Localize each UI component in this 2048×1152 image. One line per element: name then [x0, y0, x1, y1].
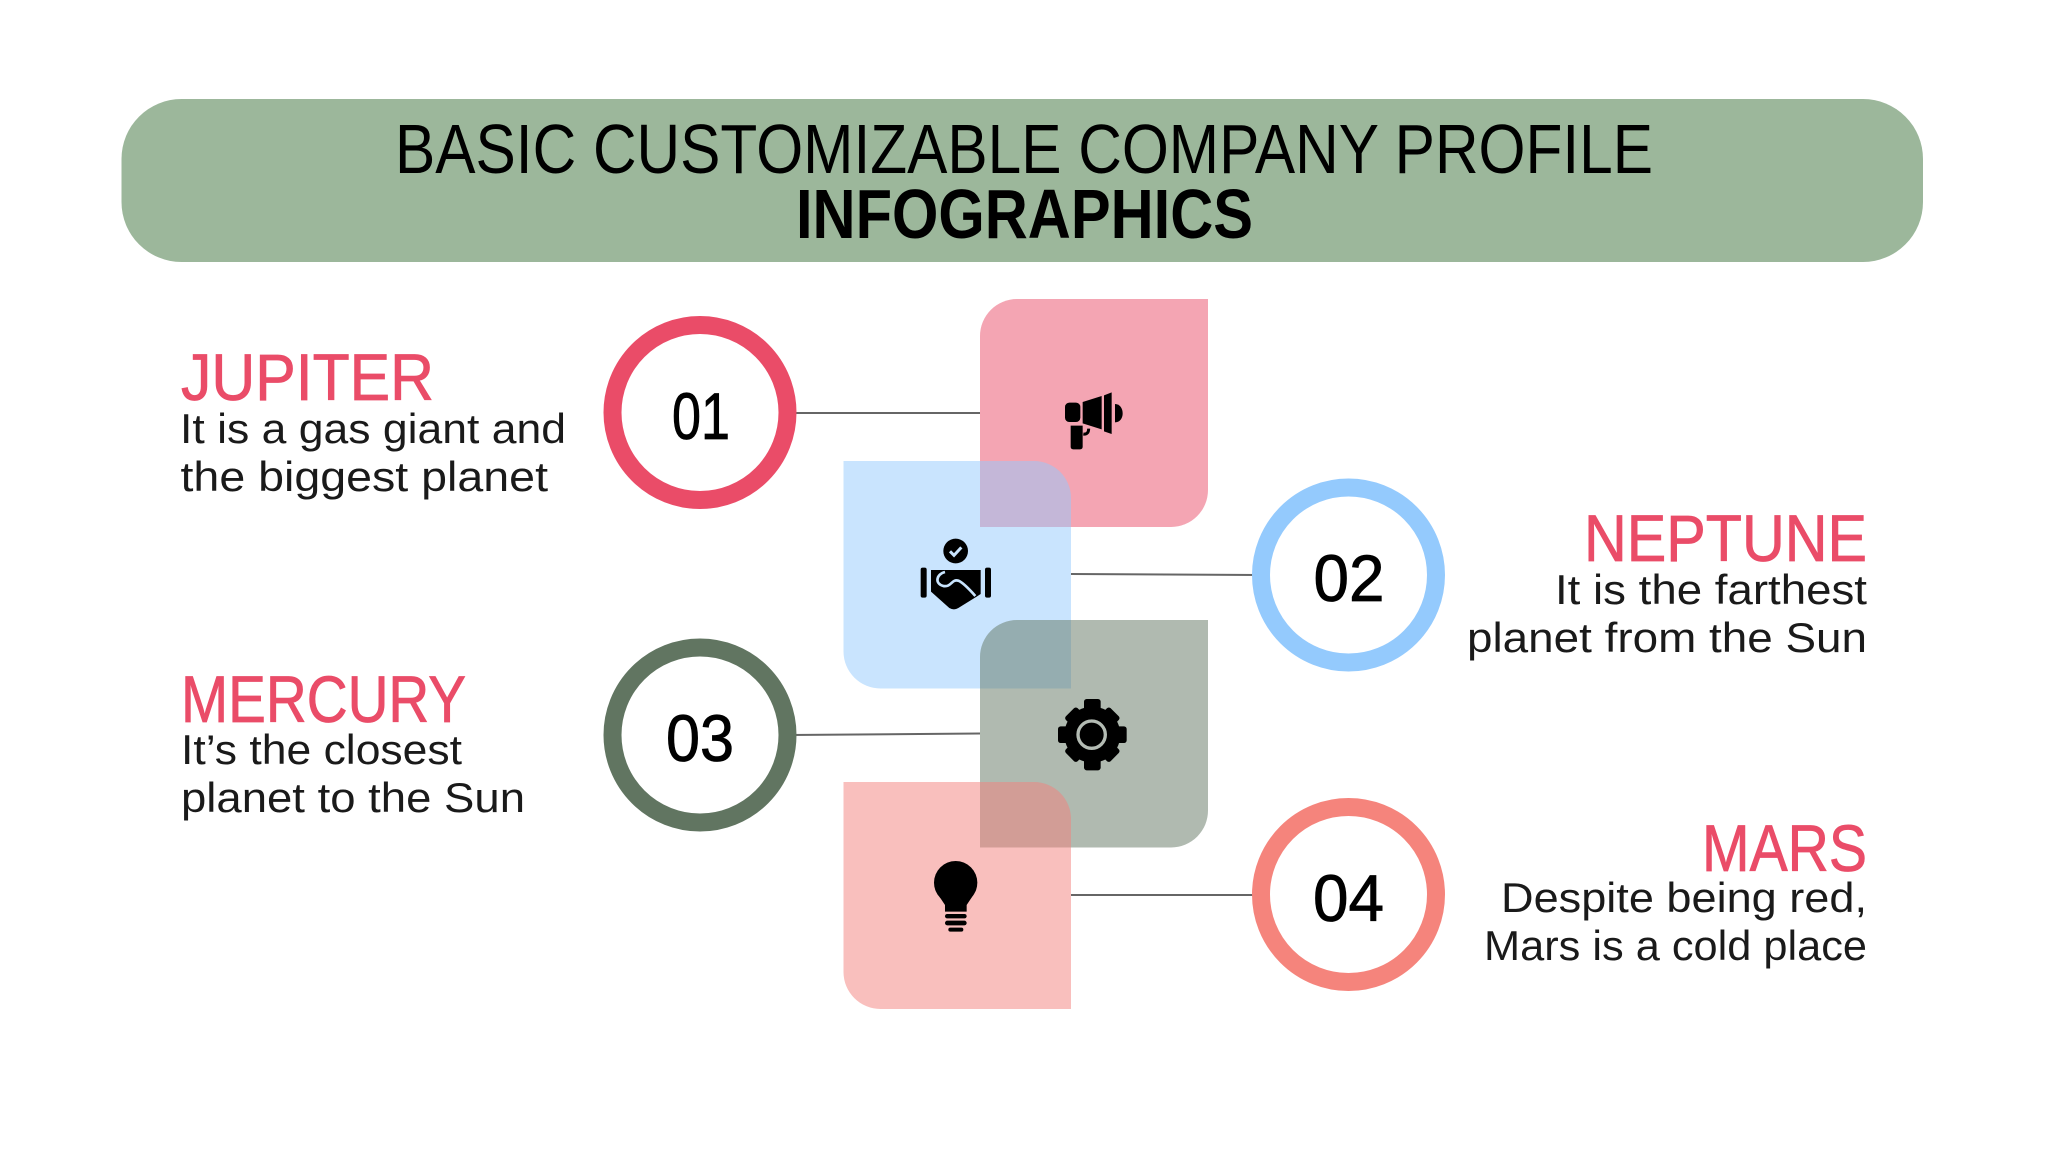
number badge 02	[1261, 488, 1436, 662]
text block: Mars	[1484, 811, 1867, 969]
text block: Mars: Mars is a cold place	[1484, 922, 1867, 969]
connector line 04	[1071, 894, 1258, 896]
text block: Mercury: MERCURY	[181, 662, 466, 736]
text block: Mars: MARS	[1702, 811, 1867, 885]
text block: Mercury: planet to the Sun	[181, 774, 525, 821]
number badge 01	[612, 325, 788, 500]
blue square	[844, 461, 1071, 688]
text block: Mars: Despite being red,	[1501, 874, 1867, 921]
title line 2: INFOGRAPHICS	[796, 175, 1253, 253]
number badge 02: 02	[1314, 541, 1384, 615]
text block: Neptune: planet from the Sun	[1467, 614, 1867, 661]
connector line 01	[790, 412, 980, 414]
title line 1: BASIC CUSTOMIZABLE COMPANY PROFILE	[395, 110, 1653, 188]
grey-green square	[980, 620, 1208, 848]
connector line 03	[790, 734, 980, 735]
number badge 04: 04	[1313, 861, 1384, 935]
text block: Jupiter: the biggest planet	[180, 453, 548, 500]
text block: Neptune: NEPTUNE	[1584, 501, 1867, 575]
icon: light bulb	[934, 861, 977, 932]
text block: Mercury: It’s the closest	[181, 726, 462, 773]
salmon square	[844, 782, 1071, 1009]
number badge 03: 03	[666, 701, 734, 775]
number badge 04	[1261, 807, 1436, 982]
pink square	[980, 299, 1208, 527]
text block: Jupiter: JUPITER	[181, 340, 434, 414]
text block: Jupiter: It is a gas giant and	[180, 405, 566, 452]
number badge 01: 01	[672, 379, 730, 453]
text block: Mercury	[181, 662, 525, 821]
number badge 03	[612, 648, 788, 822]
icon: gear	[1058, 699, 1127, 770]
text block: Neptune	[1467, 501, 1867, 661]
connector line 02	[1071, 574, 1258, 575]
text block: Jupiter	[180, 340, 566, 500]
icon: handshake with check	[921, 539, 991, 609]
title banner	[122, 99, 1923, 262]
icon: megaphone	[1065, 392, 1123, 449]
text block: Neptune: It is the farthest	[1555, 566, 1867, 613]
